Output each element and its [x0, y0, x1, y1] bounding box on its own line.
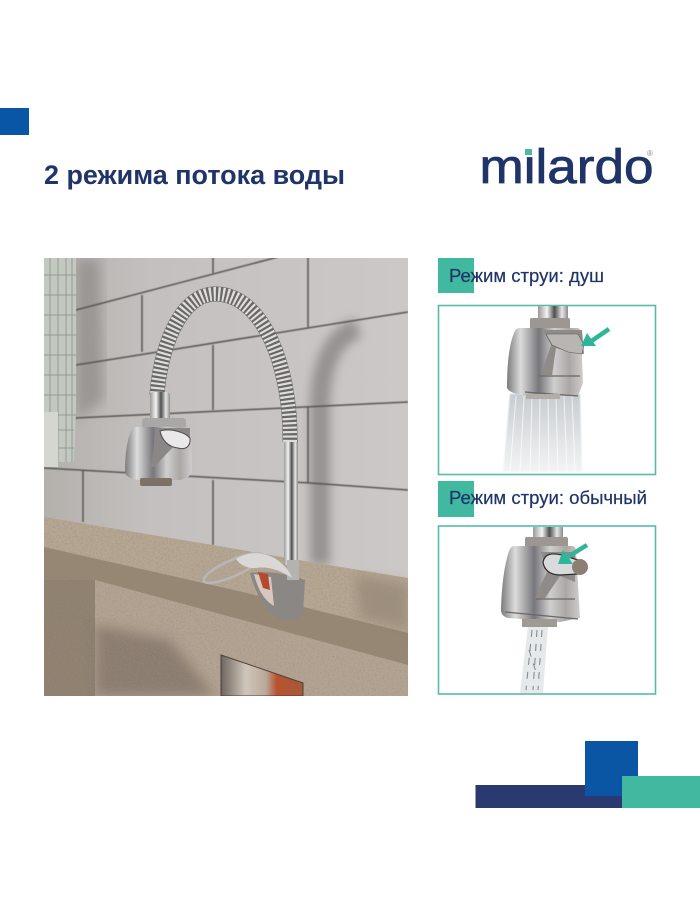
water stream and faucet head [501, 527, 588, 693]
shower spray and faucet head [503, 306, 584, 472]
faucet [125, 294, 305, 620]
label accent square [438, 258, 474, 293]
logo: milardo: milardo [480, 141, 654, 194]
photo: kitchen faucet on tiled wall [44, 257, 408, 696]
stone counter [44, 517, 408, 696]
arrow: points at switch [581, 329, 609, 346]
drain plate [221, 655, 303, 696]
label accent square [438, 481, 474, 517]
label: shower mode: Режим струи: душ [449, 266, 604, 286]
decorative corner square top left [0, 108, 29, 135]
label: normal mode: Режим струи: обычный [449, 488, 647, 508]
logo: milardo: ® [647, 149, 653, 158]
wall tiles [44, 257, 408, 578]
arrow: points at switch [558, 545, 587, 564]
panel: shower mode [438, 258, 656, 474]
towel [44, 258, 76, 467]
photo frame [438, 306, 656, 474]
panel: normal mode [438, 481, 656, 694]
photo frame [438, 526, 656, 694]
decorative block: bottom right [476, 741, 700, 808]
title: 2 режима потока воды [44, 160, 345, 190]
